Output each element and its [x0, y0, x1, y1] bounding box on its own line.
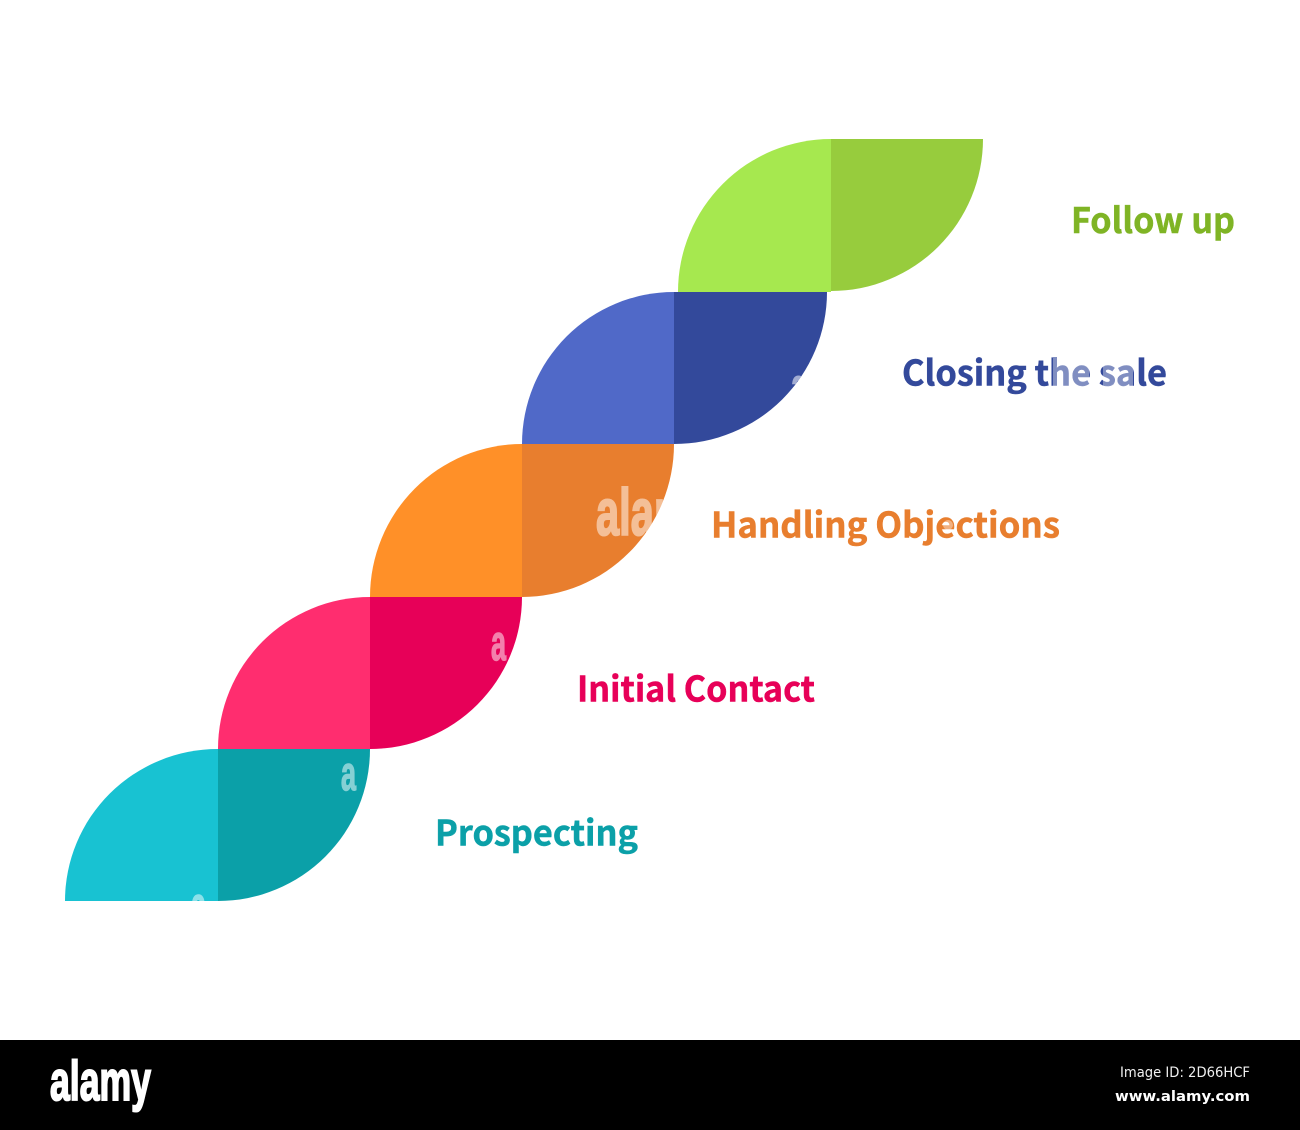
leaf: handling objections	[370, 444, 691, 597]
leaf: prospecting	[65, 749, 370, 901]
footer website: www.alamy.com	[1115, 1089, 1250, 1105]
leaf: follow up	[678, 139, 983, 292]
footer image id: Image ID: 2D66HCF	[1120, 1065, 1250, 1081]
leaf: initial contact	[218, 597, 522, 749]
footer logo: alamy	[50, 1049, 151, 1112]
leaf: prospecting: a	[191, 879, 206, 932]
leaf: handling objections: alam	[596, 475, 691, 549]
leaf: initial contact: a	[491, 615, 507, 671]
label: initial contact: Initial Contact	[577, 662, 815, 712]
label: closing the sale: Closing the sale	[902, 346, 1167, 396]
label: follow up: Follow up	[1071, 193, 1235, 244]
label: prospecting: Prospecting	[435, 806, 638, 856]
leaf: prospecting: a	[341, 748, 356, 801]
footer bar	[0, 1040, 1300, 1130]
leaf: closing the sale: a	[791, 360, 806, 413]
label: handling objections: Handling Objections	[711, 498, 1060, 548]
leaf: closing the sale	[522, 292, 827, 444]
